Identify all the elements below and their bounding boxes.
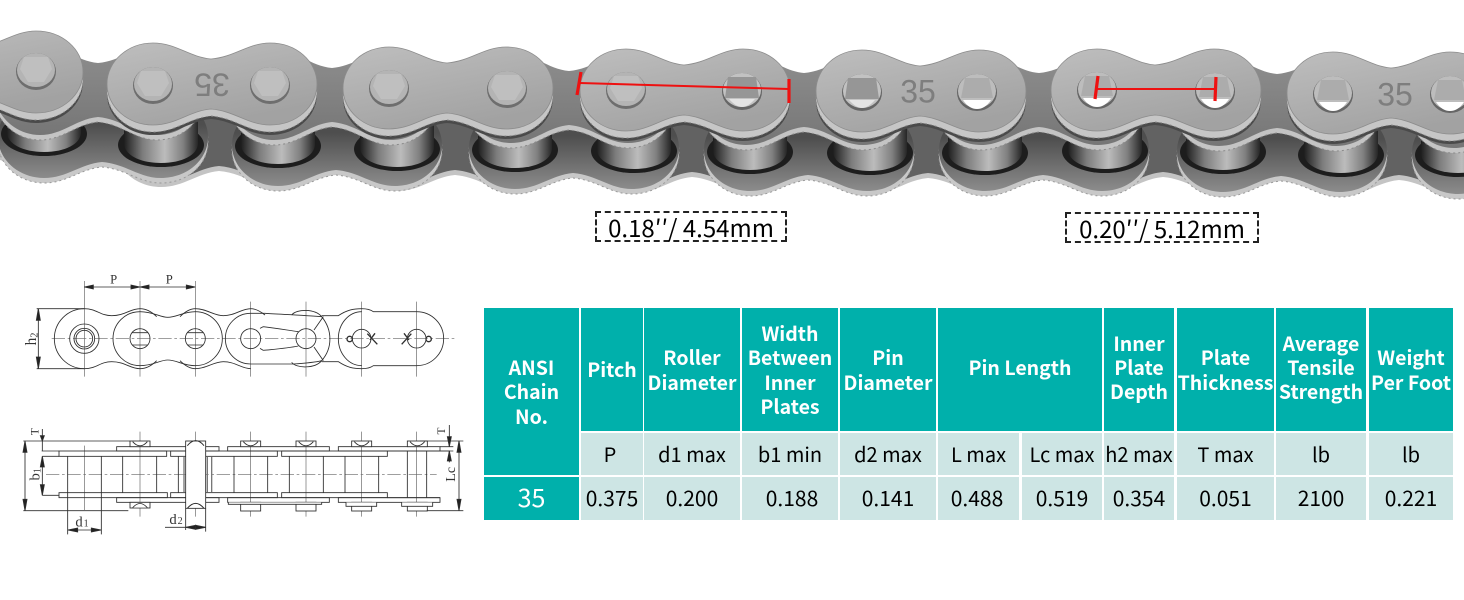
value: L: 0.488 <box>951 482 1003 512</box>
symbol: d2 max <box>840 433 936 475</box>
header: pin length <box>938 308 1102 431</box>
pitch dimension: P <box>110 272 117 286</box>
symbol: Lc max: Lc max <box>1029 439 1095 468</box>
header: width between inner plates: Between <box>748 342 832 371</box>
b1 dimension: b <box>27 473 43 480</box>
stamped 35 marks <box>194 66 1413 112</box>
rollers <box>68 451 427 498</box>
pitch dimension: P <box>166 272 173 286</box>
header: roller diameter: Roller <box>663 342 721 371</box>
symbol: h2 max <box>1104 433 1174 475</box>
stamped 35 marks: 35 <box>194 66 230 102</box>
value: weight: 0.221 <box>1385 482 1437 512</box>
pitch dimension <box>84 272 195 289</box>
symbol: lb weight: lb <box>1402 439 1420 468</box>
technical drawing: top view <box>22 425 464 534</box>
symbol: T max: T max <box>1197 439 1254 468</box>
header: inner plate depth: Plate <box>1114 352 1164 381</box>
symbol: b1 min: b1 min <box>758 439 822 468</box>
header: pin diameter: Pin <box>872 342 904 371</box>
value: width between plates: 0.188 <box>766 482 818 512</box>
symbol: lb tensile <box>1276 433 1366 475</box>
specification table <box>484 308 1453 520</box>
value: pin diameter <box>840 477 936 520</box>
T dimension left <box>29 428 44 451</box>
T dimension left: T <box>29 428 41 435</box>
b1 dimension <box>27 456 59 495</box>
value: pin diameter: 0.141 <box>862 482 914 512</box>
header: pitch <box>581 308 643 431</box>
header: width between inner plates: Width <box>761 318 818 347</box>
chain outline <box>54 309 444 369</box>
header: width between inner plates <box>742 308 838 431</box>
h2 dimension: 2 <box>29 333 40 338</box>
d1 dimension: d1 <box>75 514 89 530</box>
header: inner plate depth: Inner <box>1113 328 1165 357</box>
header: pitch: Pitch <box>587 354 637 383</box>
header: roller diameter: Diameter <box>648 366 736 396</box>
stamped 35 marks: 35 <box>900 74 936 110</box>
value: Lc <box>1022 477 1102 520</box>
d2 dimension <box>165 512 206 529</box>
value: Lc: 0.519 <box>1036 482 1088 512</box>
stamped 35 marks: 35 <box>1377 76 1413 112</box>
b1 dimension: 1 <box>32 468 43 473</box>
symbol: h2 max: h2 max <box>1105 439 1173 468</box>
symbol: P: P <box>604 439 616 468</box>
header: average tensile strength: Average <box>1283 328 1359 357</box>
Lc dimension <box>420 441 463 511</box>
d1 dimension <box>68 493 101 534</box>
symbol: P <box>581 433 643 475</box>
T dimension right: T <box>436 427 448 434</box>
center and pin lines <box>52 281 457 377</box>
symbol: d1 max: d1 max <box>658 439 726 468</box>
header: ANSI chain no: No. <box>515 401 548 430</box>
upper inner plates <box>0 45 1464 153</box>
header: ANSI chain no: ANSI <box>509 352 554 381</box>
T dimension right <box>436 425 453 462</box>
value: T: 0.051 <box>1199 482 1252 512</box>
header: average tensile strength <box>1276 308 1366 431</box>
value: chain 35 <box>484 477 579 520</box>
header: pin diameter <box>840 308 936 431</box>
callout: 0.20 in: 0.20′′/ 5.12mm <box>1079 210 1245 245</box>
Lc dimension: Lc <box>444 467 459 482</box>
d2 dimension: d2 <box>169 512 183 528</box>
chain photo <box>0 30 1464 200</box>
header: inner plate depth: Depth <box>1110 376 1168 405</box>
symbol: Lc max <box>1022 433 1102 475</box>
header: roller diameter <box>644 308 740 431</box>
red measure: roller diameter <box>1095 76 1216 101</box>
front outer plates <box>0 31 1464 144</box>
value: h2 <box>1104 477 1174 520</box>
value: pitch <box>581 477 643 520</box>
header: ANSI chain no <box>484 308 579 475</box>
symbol: lb weight <box>1369 433 1453 475</box>
header: weight per foot: Per Foot <box>1371 366 1451 396</box>
lower inner plates <box>0 89 1464 199</box>
link holes <box>70 324 426 353</box>
cotter pins <box>347 333 431 344</box>
value: roller diameter <box>644 477 740 520</box>
red measure: plate depth <box>577 72 789 103</box>
value: chain 35: 35 <box>518 479 545 515</box>
callout: 0.18 in: 0.18′′/ 4.54mm <box>608 209 774 244</box>
value: L <box>938 477 1019 520</box>
value: roller diameter: 0.200 <box>666 482 718 512</box>
rollers <box>1 97 1464 177</box>
technical drawing: side view <box>23 272 454 377</box>
header: width between inner plates: Plates <box>760 391 820 420</box>
header: ANSI chain no: Chain <box>504 376 559 405</box>
symbol: lb tensile: lb <box>1312 439 1330 468</box>
header: plate thickness: Thickness <box>1178 366 1273 396</box>
connecting pin <box>184 441 212 532</box>
header: average tensile strength: Strength <box>1279 376 1363 405</box>
plates <box>59 447 450 502</box>
pin heads <box>130 441 433 511</box>
value: pitch: 0.375 <box>586 482 638 512</box>
header: width between inner plates: Inner <box>764 366 816 396</box>
symbol: d2 max: d2 max <box>854 439 922 468</box>
header: pin diameter: Diameter <box>844 366 932 396</box>
symbol: L max: L max <box>951 439 1006 468</box>
value: weight <box>1369 477 1453 520</box>
symbol: d1 max <box>644 433 740 475</box>
header: inner plate depth <box>1104 308 1174 431</box>
header: plate thickness: Plate <box>1201 342 1250 371</box>
value: width between plates <box>742 477 838 520</box>
header: plate thickness <box>1177 308 1274 431</box>
header: average tensile strength: Tensile <box>1287 352 1355 381</box>
symbol: b1 min <box>742 433 838 475</box>
value: T <box>1177 477 1274 520</box>
value: tensile <box>1276 477 1366 520</box>
header: weight per foot: Weight <box>1377 342 1445 371</box>
value: h2: 0.354 <box>1113 482 1165 512</box>
h2 dimension <box>23 309 84 369</box>
header: weight per foot <box>1369 308 1453 431</box>
center lines <box>46 432 437 517</box>
value: tensile: 2100 <box>1298 482 1344 512</box>
h2 dimension: h <box>23 338 40 345</box>
symbol: L max <box>938 433 1019 475</box>
pins <box>16 53 1464 113</box>
outer dimension lines <box>23 441 130 511</box>
back outer plates <box>0 86 1464 196</box>
symbol: T max <box>1177 433 1274 475</box>
header: pin length: Pin Length <box>968 352 1072 381</box>
